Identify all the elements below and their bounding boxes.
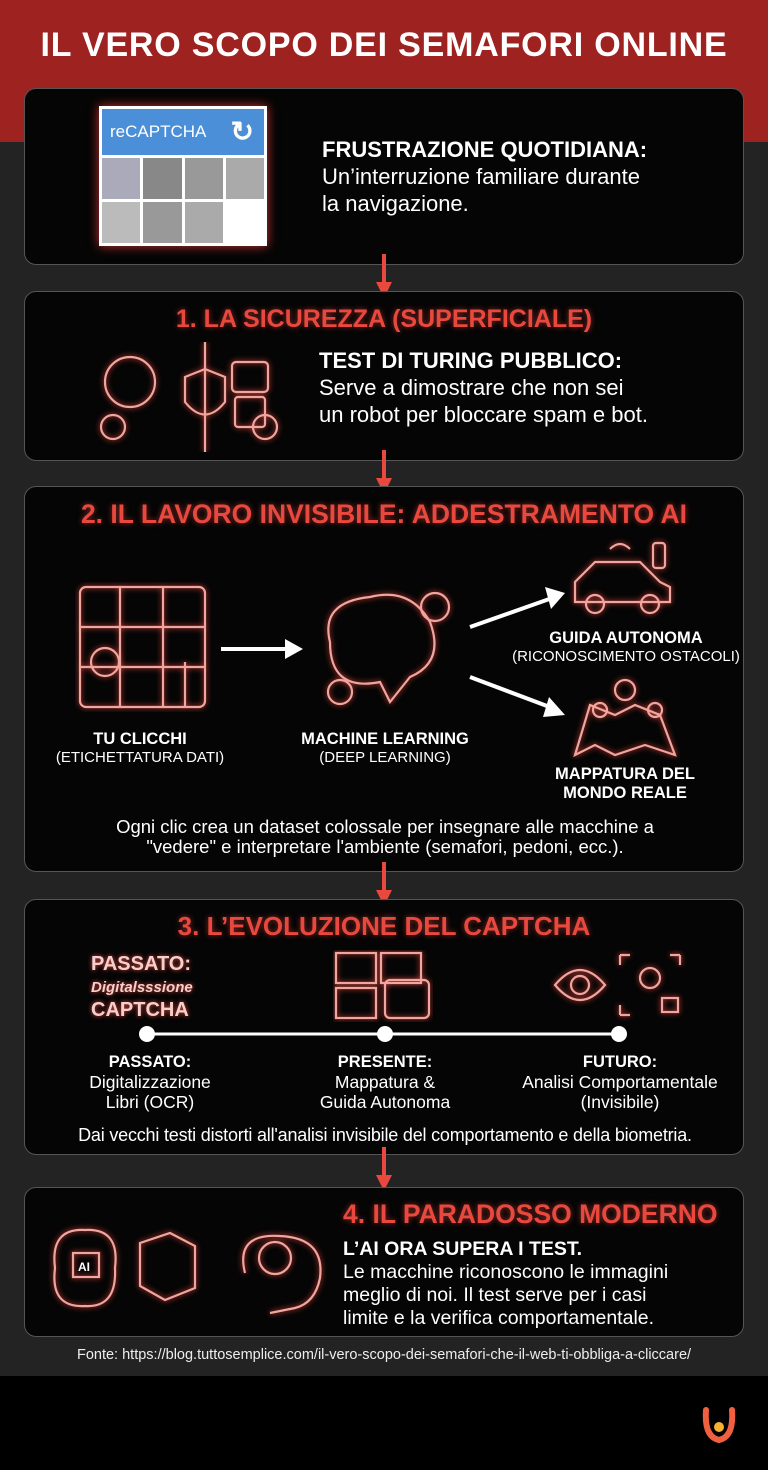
label: guida autonoma	[512, 629, 740, 665]
label: mappatura	[555, 765, 695, 802]
label: passato: PASSATO:	[109, 1053, 191, 1071]
label: tu clicchi: TU CLICCHI	[93, 730, 187, 748]
icon: passato text: PASSATO:	[91, 953, 191, 975]
label: machine learning: MACHINE LEARNING	[301, 730, 469, 748]
icon: brain	[322, 588, 454, 710]
text: Serve a dimostrare che non sei	[319, 375, 624, 400]
icon: eye biometric	[550, 950, 686, 1021]
label: futuro	[522, 1053, 718, 1112]
heading: 4. IL PARADOSSO MODERNO	[343, 1199, 717, 1229]
label: tu clicchi	[56, 730, 224, 766]
label: presente: Mappatura &	[335, 1072, 435, 1092]
text: frustrazione: Un’interruzione familiare durante	[322, 164, 640, 189]
arrow	[376, 862, 392, 899]
label: presente: PRESENTE:	[338, 1053, 432, 1071]
label: passato: Digitalizzazione	[89, 1072, 211, 1092]
text: summary: Dai vecchi testi distorti all'analisi invisibile del comportamento e della biometria.	[78, 1125, 692, 1145]
label: machine learning	[301, 730, 469, 766]
panel: addestramento	[24, 486, 744, 872]
label: passato: Libri (OCR)	[106, 1092, 194, 1112]
icon: passato text	[88, 952, 196, 1021]
icon: grid bus	[333, 950, 433, 1022]
text: dataset	[116, 816, 654, 857]
icon: recaptcha: reCAPTCHA	[110, 122, 206, 141]
text: dataset: Ogni clic crea un dataset colossale per insegnare alle macchine a	[116, 816, 654, 837]
icons: AI brain cube stopwatch	[48, 1224, 326, 1318]
arrows diagonal	[469, 587, 565, 717]
arrow right	[221, 639, 303, 659]
panel: evoluzione	[24, 899, 744, 1155]
text: meglio di noi. Il test serve per i casi	[343, 1284, 646, 1306]
icon: recaptcha: ↻	[231, 116, 254, 147]
arrow	[376, 450, 392, 486]
label: presente	[320, 1053, 450, 1112]
text: limite e la verifica comportamentale.	[343, 1307, 654, 1329]
text: un robot per bloccare spam e bot.	[319, 402, 648, 427]
icon: car	[569, 537, 676, 618]
icon: map	[570, 675, 680, 760]
source: Fonte: https://blog.tuttosemplice.com/il-vero-scopo-dei-semafori-che-il-web-ti-obbliga-a-cliccare/	[77, 1347, 691, 1363]
heading: 3. L’EVOLUZIONE DEL CAPTCHA	[178, 911, 590, 941]
timeline	[139, 1026, 627, 1042]
icon: human shield robot	[96, 342, 282, 452]
label: machine learning: (DEEP LEARNING)	[319, 749, 451, 766]
icon: passato text: CAPTCHA	[91, 999, 189, 1021]
text: dataset: "vedere" e interpretare l'ambiente (semafori, pedoni, ecc.).	[146, 836, 624, 857]
label: guida autonoma: (RICONOSCIMENTO OSTACOLI)	[512, 648, 740, 665]
text	[319, 348, 648, 427]
label: guida autonoma: GUIDA AUTONOMA	[549, 629, 703, 647]
panel: sicurezza	[24, 291, 744, 461]
icon: passato text: Digitalsssione	[91, 979, 193, 996]
icon: grid click	[75, 582, 211, 712]
icons: AI brain cube stopwatch: AI	[78, 1260, 90, 1274]
title: IL VERO SCOPO DEI SEMAFORI ONLINE	[41, 26, 727, 64]
label: mappatura: MAPPATURA DEL	[555, 765, 695, 783]
label: passato	[89, 1053, 211, 1112]
logo	[702, 1407, 736, 1443]
text: frustrazione: la navigazione.	[322, 191, 469, 216]
arrow	[376, 1147, 392, 1187]
label: futuro: FUTURO:	[583, 1053, 657, 1071]
arrow	[376, 254, 392, 291]
label: futuro: (Invisibile)	[581, 1092, 659, 1112]
heading: 2. IL LAVORO INVISIBILE: ADDESTRAMENTO AI	[81, 499, 687, 529]
icon: recaptcha	[99, 106, 267, 246]
text: L’AI ORA SUPERA I TEST.	[343, 1238, 582, 1260]
text: TEST DI TURING PUBBLICO:	[319, 348, 622, 373]
label: futuro: Analisi Comportamentale	[522, 1072, 718, 1092]
text: Le macchine riconoscono le immagini	[343, 1261, 668, 1283]
panel: paradosso	[24, 1187, 744, 1337]
text: frustrazione: FRUSTRAZIONE QUOTIDIANA:	[322, 137, 647, 162]
heading: 1. LA SICUREZZA (SUPERFICIALE)	[176, 305, 592, 333]
panel: frustrazione	[24, 88, 744, 265]
label: presente: Guida Autonoma	[320, 1092, 450, 1112]
text	[343, 1238, 668, 1329]
text: frustrazione	[322, 137, 647, 216]
label: tu clicchi: (ETICHETTATURA DATI)	[56, 749, 224, 766]
label: mappatura: MONDO REALE	[563, 784, 687, 802]
